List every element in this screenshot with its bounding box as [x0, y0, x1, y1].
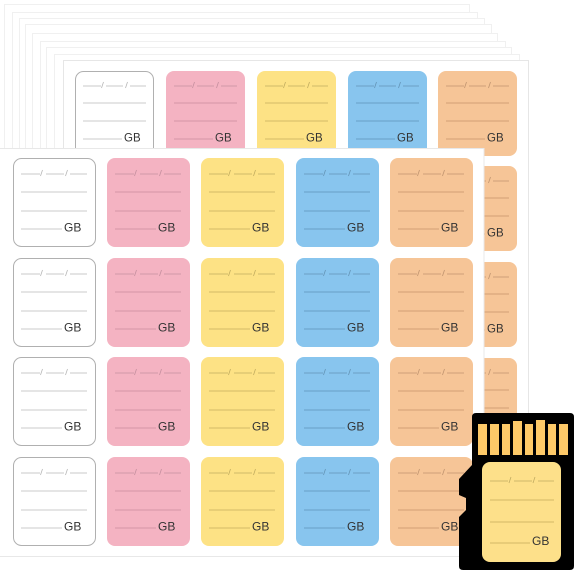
row 2 white: GB	[64, 320, 81, 334]
card body	[459, 413, 574, 570]
row 1 blue: GB	[347, 220, 364, 234]
back label pink: GB	[215, 132, 232, 144]
row 2 white	[14, 258, 96, 346]
back label orange row 4: GB	[487, 420, 504, 432]
back label yellow	[257, 71, 336, 156]
row 1 pink: GB	[158, 220, 175, 234]
yellow label on card: GB	[532, 534, 549, 548]
gold contact pins	[478, 420, 568, 455]
row 3 yellow: GB	[252, 420, 269, 434]
row 4 blue	[296, 457, 379, 546]
row 1 yellow	[201, 158, 284, 247]
row 4 white	[14, 458, 96, 546]
back label orange row 3	[438, 262, 517, 347]
yellow label on card	[482, 462, 561, 562]
back label orange row 2	[438, 166, 517, 251]
back label blue	[348, 71, 427, 156]
row 3 white: GB	[64, 420, 81, 434]
row 4 pink	[107, 457, 190, 546]
row 3 pink	[107, 357, 190, 446]
row 3 pink: GB	[158, 420, 175, 434]
back label pink	[166, 71, 245, 156]
back label orange row 2: GB	[487, 228, 504, 240]
row 4 white: GB	[64, 520, 81, 534]
row 1 white: GB	[64, 220, 81, 234]
row 1 blue	[296, 158, 379, 247]
row 3 yellow	[201, 357, 284, 446]
row 3 orange	[390, 357, 473, 446]
row 3 blue	[296, 357, 379, 446]
micro SD card	[459, 413, 574, 570]
row 2 orange	[390, 258, 473, 347]
row 4 blue: GB	[347, 520, 364, 534]
row 4 orange: GB	[441, 520, 458, 534]
back label white	[76, 72, 154, 156]
row 4 pink: GB	[158, 520, 175, 534]
row 2 yellow: GB	[252, 320, 269, 334]
row 1 pink	[107, 158, 190, 247]
back label orange row 4	[438, 358, 517, 443]
row 2 yellow	[201, 258, 284, 347]
back sheet labels	[76, 71, 517, 443]
row 4 yellow: GB	[252, 520, 269, 534]
row 2 pink	[107, 258, 190, 347]
row 2 orange: GB	[441, 320, 458, 334]
back label yellow: GB	[306, 132, 323, 144]
row 3 white	[14, 358, 96, 446]
row 1 orange: GB	[441, 220, 458, 234]
row 2 blue	[296, 258, 379, 347]
row 2 blue: GB	[347, 320, 364, 334]
back label orange row 1: GB	[487, 132, 504, 144]
front sheet	[0, 148, 484, 556]
stack of back sheets	[4, 4, 528, 460]
back label orange row 1	[438, 71, 517, 156]
front sheet labels	[14, 158, 473, 546]
back label white: GB	[124, 132, 141, 144]
row 1 yellow: GB	[252, 220, 269, 234]
back label orange row 3: GB	[487, 324, 504, 336]
row 4 orange	[390, 457, 473, 546]
back label blue: GB	[397, 132, 414, 144]
row 3 orange: GB	[441, 420, 458, 434]
row 3 blue: GB	[347, 420, 364, 434]
row 1 white	[14, 158, 96, 246]
row 1 orange	[390, 158, 473, 247]
row 4 yellow	[201, 457, 284, 546]
row 2 pink: GB	[158, 320, 175, 334]
